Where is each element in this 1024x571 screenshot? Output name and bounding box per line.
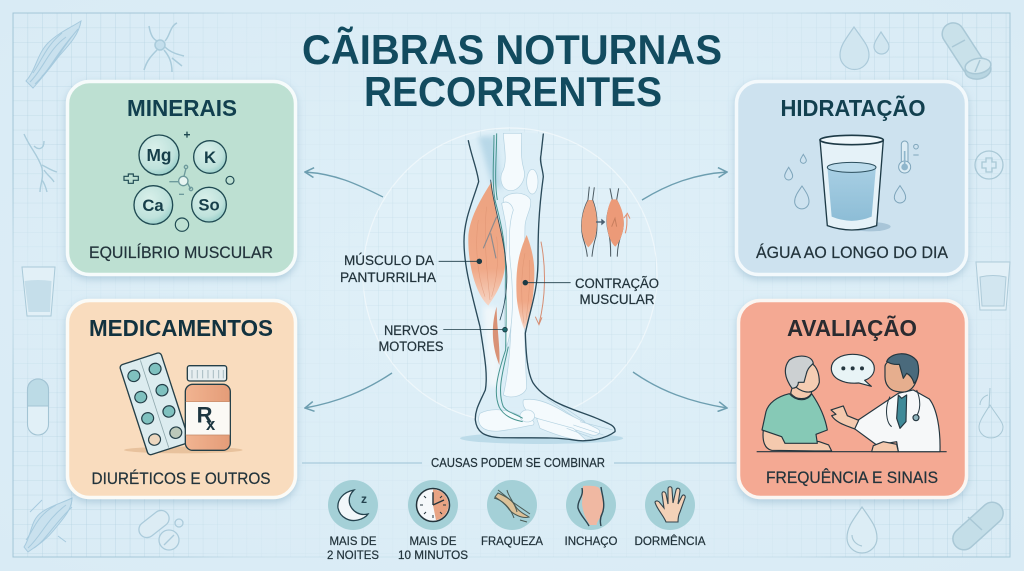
patient shirt [762,394,827,443]
caption: dormência: DORMÊNCIA [634,533,706,548]
speech bubble [831,354,874,386]
icon: crescent moon [328,480,378,530]
bones [479,133,613,441]
title: RECORRENTES [364,68,662,115]
section: causas podem se combinar: CAUSAS PODEM SE COMBINAR [431,456,605,470]
caption: inchaço: INCHAÇO [564,534,618,548]
inset muscle contraction [582,187,630,257]
icon: minerals: Ca [142,196,164,215]
heading: avaliação: AVALIAÇÃO [787,314,917,341]
caption: mais de 10 minutos [398,534,468,562]
decorative icon: capsule bottom left [136,507,183,550]
caption: avaliação: FREQUÊNCIA E SINAIS [766,468,938,487]
decorative icon: glass left [22,267,55,316]
caption: mais de 2 noites: 2 NOITES [327,548,379,562]
arrow: to avaliação [633,372,727,408]
decorative icon: drop right [979,388,1003,438]
panel: avaliação [738,300,966,498]
heading: medicamentos: MEDICAMENTOS [89,315,273,341]
icon: minerals: Mg [146,145,172,165]
caption: fraqueza: FRAQUEZA [481,534,543,548]
label: músculo da panturrilha: PANTURRILHA [340,270,436,285]
panel: minerais [68,82,296,274]
label dots and leader lines [439,259,571,332]
caption: hidratação: ÁGUA AO LONGO DO DIA [756,243,948,262]
icon: minerals: So [198,196,220,215]
heading: hidratação: HIDRATAÇÃO [780,94,926,121]
leg outline fill [464,130,615,441]
doctor head [885,358,917,392]
decorative icon: capsule bottom right [948,498,1008,554]
doctor hand [831,406,859,429]
patient neck and head [791,385,812,399]
icon: pill blister and Rx bottle [119,352,243,456]
caption: mais de 10 minutos: MAIS DE [410,534,456,548]
decorative icon: drop bottom right [847,507,877,553]
patient forearm [763,430,832,451]
arrow: to minerais [305,172,383,197]
label: nervos motores: NERVOS [384,323,438,338]
icon: glass of water, drops, thermometer [785,135,919,231]
contraction arrow [535,242,545,325]
caption: medicamentos: DIURÉTICOS E OUTROS [92,469,270,488]
icon: minerals: K [204,148,216,167]
decorative icon: capsule and pill top right [938,19,992,81]
soleus muscle [516,235,534,329]
nerve [493,133,523,422]
decorative icon: muscle bottom left [24,498,72,552]
panel: medicamentos [68,300,296,498]
caption: mais de 2 noites: MAIS DE [330,534,376,548]
arrow: to hidratação [642,172,727,200]
heading: minerais: MINERAIS [127,95,237,121]
tie [897,395,907,428]
stethoscope [887,390,920,427]
decorative icon: neuron [144,23,184,72]
icon: weakness muscle [487,480,537,530]
decorative icon: plus circle [975,151,1003,179]
icon: patient and doctor conversation [757,354,947,452]
icon: pill blister and Rx bottle: R [197,402,213,427]
title [302,26,722,115]
caption: mais de 10 minutos: 10 MINUTOS [398,548,468,562]
label: músculo da panturrilha [340,253,436,285]
decorative icon: glass right [976,262,1010,310]
title: CÃIBRAS NOTURNAS [302,26,722,73]
label: nervos motores [378,323,444,354]
lower muscle [493,307,500,365]
central circle [363,128,657,422]
caption: minerais: EQUILÍBRIO MUSCULAR [89,243,273,262]
icon: hand numbness [645,480,695,530]
label: contração muscular: CONTRAÇÃO [575,276,659,291]
icon: crescent moon: z [361,492,367,506]
label: músculo da panturrilha: MÚSCULO DA [344,253,434,268]
label: contração muscular [575,276,659,307]
decorative icon: capsule left [28,379,48,435]
leg outline [464,134,615,441]
doctor coat [854,390,940,452]
arrow: to medicamentos [305,373,392,408]
calf muscle [468,182,506,306]
icon: minerals [124,132,234,231]
caption: mais de 2 noites [327,534,379,562]
anatomy: leg [439,130,630,444]
label: contração muscular: MUSCULAR [580,292,655,307]
icon: pill blister and Rx bottle: x [206,415,216,434]
decorative icon: drops top right [840,27,889,70]
label: nervos motores: MOTORES [378,339,444,354]
decorative icon: muscle top left [26,21,81,88]
icon: clock [408,480,458,530]
decorative icon: branch [24,134,57,192]
icon: swelling [566,480,616,530]
panel: hidratação [736,82,966,274]
